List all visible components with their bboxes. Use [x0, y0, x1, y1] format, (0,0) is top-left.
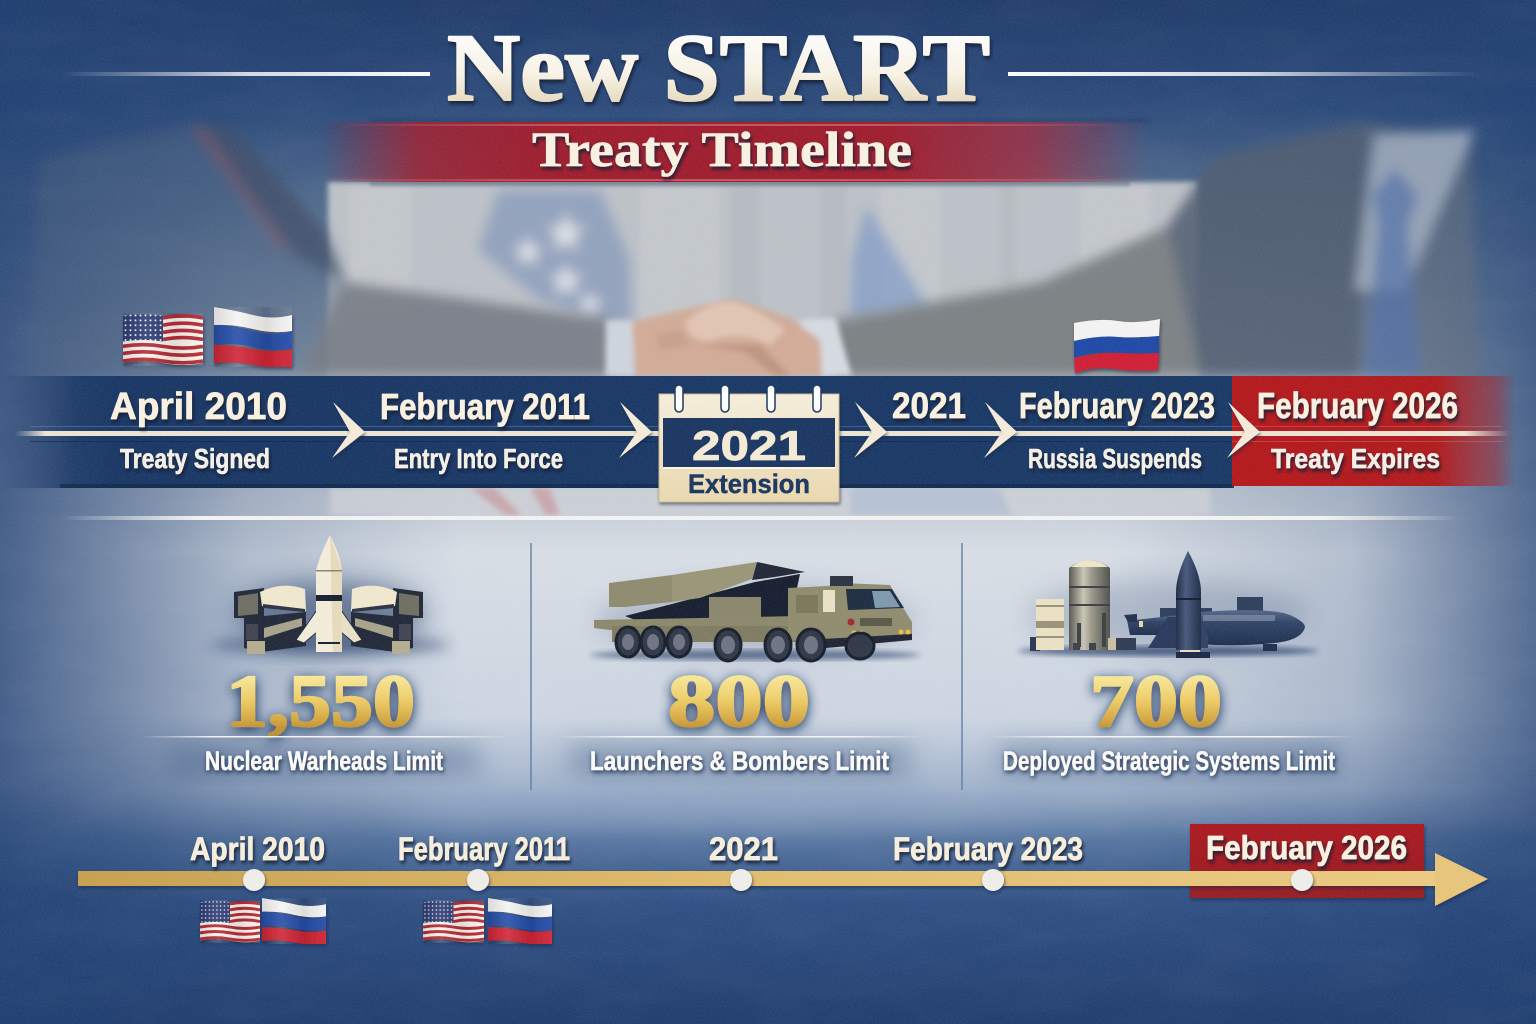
- bottom timeline: [78, 824, 1488, 946]
- milestone: April 2010: [110, 386, 287, 474]
- stat panel: launchers: [555, 562, 925, 776]
- stat panel: deployed systems: [985, 551, 1355, 776]
- flags: signing: [123, 307, 294, 369]
- label: [555, 736, 925, 776]
- ribbon red section: [1232, 376, 1516, 486]
- icon: missile with launch modules: [210, 535, 450, 654]
- milestone: February 2026: [1257, 385, 1458, 474]
- milestone: February 2023: [1019, 385, 1215, 474]
- milestone: February 2026: February 2026: [1257, 385, 1458, 426]
- milestone: February 2011: Entry Into Force: [394, 443, 563, 474]
- milestone: April 2010: April 2010: [110, 386, 287, 428]
- title rule right: [1008, 72, 1480, 76]
- highlight box: February 2026: [1190, 824, 1424, 898]
- timeline bar with arrowhead: [78, 853, 1488, 906]
- milestone: February 2011: February 2011: [380, 386, 590, 427]
- timeline dots: [243, 869, 1313, 891]
- blurred Russian flag: [850, 205, 930, 318]
- stat panel: warheads: [140, 535, 510, 776]
- label: [985, 736, 1355, 776]
- icon: silo, warhead and submarine: [1018, 551, 1318, 658]
- label: Launchers & Bombers Limit: [590, 746, 889, 776]
- cuffs and clasped hands: [606, 300, 852, 376]
- faded flag stripes under ribbon: [330, 488, 1210, 515]
- calendar label: Extension: [688, 469, 810, 499]
- label: Deployed Strategic Systems Limit: [1003, 746, 1335, 776]
- milestone: 2021: 2021: [892, 385, 966, 426]
- milestone: February 2023: February 2023: [1019, 385, 1215, 426]
- stat dividers: [530, 543, 963, 790]
- calendar year: 2021: [692, 422, 806, 469]
- blurred US flag: [478, 190, 640, 372]
- title rule left: [60, 72, 430, 76]
- milestone: February 2011: [380, 386, 590, 474]
- section rule: [60, 516, 1460, 520]
- flags: February 2011: [423, 898, 554, 946]
- milestone: February 2026: Treaty Expires: [1271, 443, 1440, 474]
- number: 1,550: [226, 661, 415, 743]
- right suit: [835, 123, 1480, 376]
- timeline label: February 2011: February 2011: [398, 831, 570, 867]
- ribbon blue section: [0, 376, 1234, 488]
- number: 700: [1090, 661, 1222, 743]
- handshake photo backdrop: [30, 123, 1480, 515]
- subtitle text: Treaty Timeline: [532, 121, 912, 177]
- chevrons: [332, 402, 1260, 458]
- flag: Russia suspends: [1074, 319, 1160, 373]
- icon: missile launcher truck: [590, 562, 920, 661]
- left suit: [30, 125, 610, 376]
- flags: April 2010: [200, 898, 328, 946]
- curtain backdrop: [328, 182, 1198, 376]
- timeline label: February 2026: February 2026: [1206, 829, 1407, 866]
- subtitle banner: [320, 119, 1150, 186]
- label: Nuclear Warheads Limit: [205, 746, 443, 776]
- number: 800: [668, 661, 810, 743]
- timeline label: April 2010: April 2010: [190, 831, 325, 867]
- milestone: April 2010: Treaty Signed: [120, 443, 270, 474]
- ribbon center line: [15, 431, 1510, 436]
- timeline label: 2021: 2021: [709, 831, 778, 867]
- label: [140, 736, 510, 776]
- title: New START: [447, 14, 990, 121]
- milestone: February 2023: Russia Suspends: [1028, 443, 1202, 474]
- timeline ribbon: [0, 376, 1516, 488]
- calendar: 2021 extension: [659, 385, 839, 502]
- timeline label: February 2023: February 2023: [893, 831, 1083, 867]
